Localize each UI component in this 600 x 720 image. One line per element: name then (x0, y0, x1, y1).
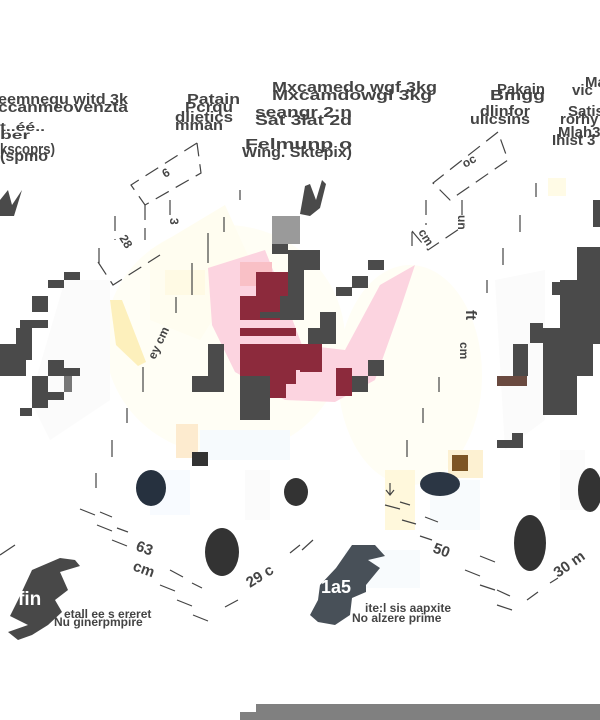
pale product body: right unit (338, 178, 566, 588)
dark backrest centre (192, 216, 384, 420)
dimension labels: 63 (134, 538, 155, 559)
icon: top centre handle (300, 180, 326, 216)
dimension labels: cm (131, 558, 157, 581)
dimension labels: un (455, 215, 469, 230)
heading: top right note: ulicsins (470, 111, 530, 128)
heading: top centre note: Wing. Sktepix) (242, 144, 352, 161)
left dimension box outline (98, 143, 201, 285)
pale product body: left unit (105, 205, 345, 515)
caption: left badge: Nu ginerpmpire (54, 615, 143, 629)
dimension labels (116, 151, 588, 591)
heading: top centre note: Felmunp o (245, 136, 352, 153)
left bottom dimension lines (0, 509, 300, 621)
heading: top centre-left note: mman (175, 117, 223, 134)
icon: left armrest dark blocks (0, 190, 80, 416)
vertical guide marks (96, 183, 536, 488)
right dimension box outline (412, 132, 508, 250)
badge: left (8, 558, 80, 640)
heading: top left note: (spmo (0, 148, 48, 165)
dimension labels: 28 (116, 232, 136, 251)
dark red cushion (240, 272, 352, 398)
caption: right badge: No alzere prime (352, 611, 442, 625)
dimension labels: 29 c (243, 562, 277, 591)
dimension labels: ft (462, 310, 479, 320)
dimension labels: oc (460, 151, 479, 171)
heading: far right note (552, 74, 600, 149)
heading: top centre-left note (175, 91, 240, 134)
dimension labels: 6 (160, 165, 173, 181)
badge: left: fin (18, 589, 41, 610)
pale gray side panels (30, 270, 585, 520)
dimension labels: cm (415, 226, 437, 248)
heading: top centre note: seangr 2:n (255, 104, 352, 121)
heading: top left note (0, 91, 129, 165)
heading: top right note: Bmgg (490, 87, 545, 104)
heading: top left note: kscoprs) (0, 141, 55, 158)
badge: right: 1a5 (321, 577, 351, 597)
heading: top right note: dlinfor (480, 103, 530, 120)
icon: wheels (136, 452, 600, 576)
heading: far right note: rorhy (560, 111, 599, 128)
heading: top left note: eemnequ witd 3k (0, 91, 129, 108)
heading: far right note: Mlah3 (558, 124, 600, 141)
right bottom dimension lines (302, 483, 558, 610)
heading: top centre note: Mxcamedo wgf 3kg (272, 79, 437, 96)
heading: top right note (470, 81, 545, 128)
badge: right (310, 545, 385, 625)
caption: right badge (352, 601, 451, 625)
dimension labels: cm (457, 342, 471, 359)
heading: top left note: ccanmeovenzta (0, 99, 129, 116)
dimension labels: ey cm (145, 325, 172, 361)
heading: top right note: Pakain (497, 81, 545, 98)
heading: top centre note (242, 79, 437, 161)
heading: top centre-left note: Pcrqu (185, 99, 233, 116)
caption: left badge (54, 607, 151, 629)
heading: top centre-left note: Patain (187, 91, 240, 108)
dimension labels: 3 (167, 218, 181, 225)
dimension labels: 50 (431, 540, 452, 561)
heading: top centre note: Mxcamdowgl 3kg (272, 87, 432, 104)
heading: top centre note: Sat 3lat 2d (255, 112, 352, 129)
heading: top left note: ber (0, 128, 31, 142)
dimension labels: 30 m (551, 548, 588, 581)
heading: top left note: t..éé.. (0, 120, 45, 134)
caption: right badge: ite:l sis aapxite (365, 601, 451, 615)
pink seat (208, 250, 415, 402)
heading: far right note: Ihist 3 (552, 132, 595, 149)
heading: top centre-left note: dlietics (175, 109, 233, 126)
caption: left badge: etall ee s ereret (64, 607, 151, 621)
icon: right backrest dark blocks (497, 200, 600, 448)
bottom gray strip (240, 704, 600, 720)
heading: far right note: vic (572, 82, 593, 99)
